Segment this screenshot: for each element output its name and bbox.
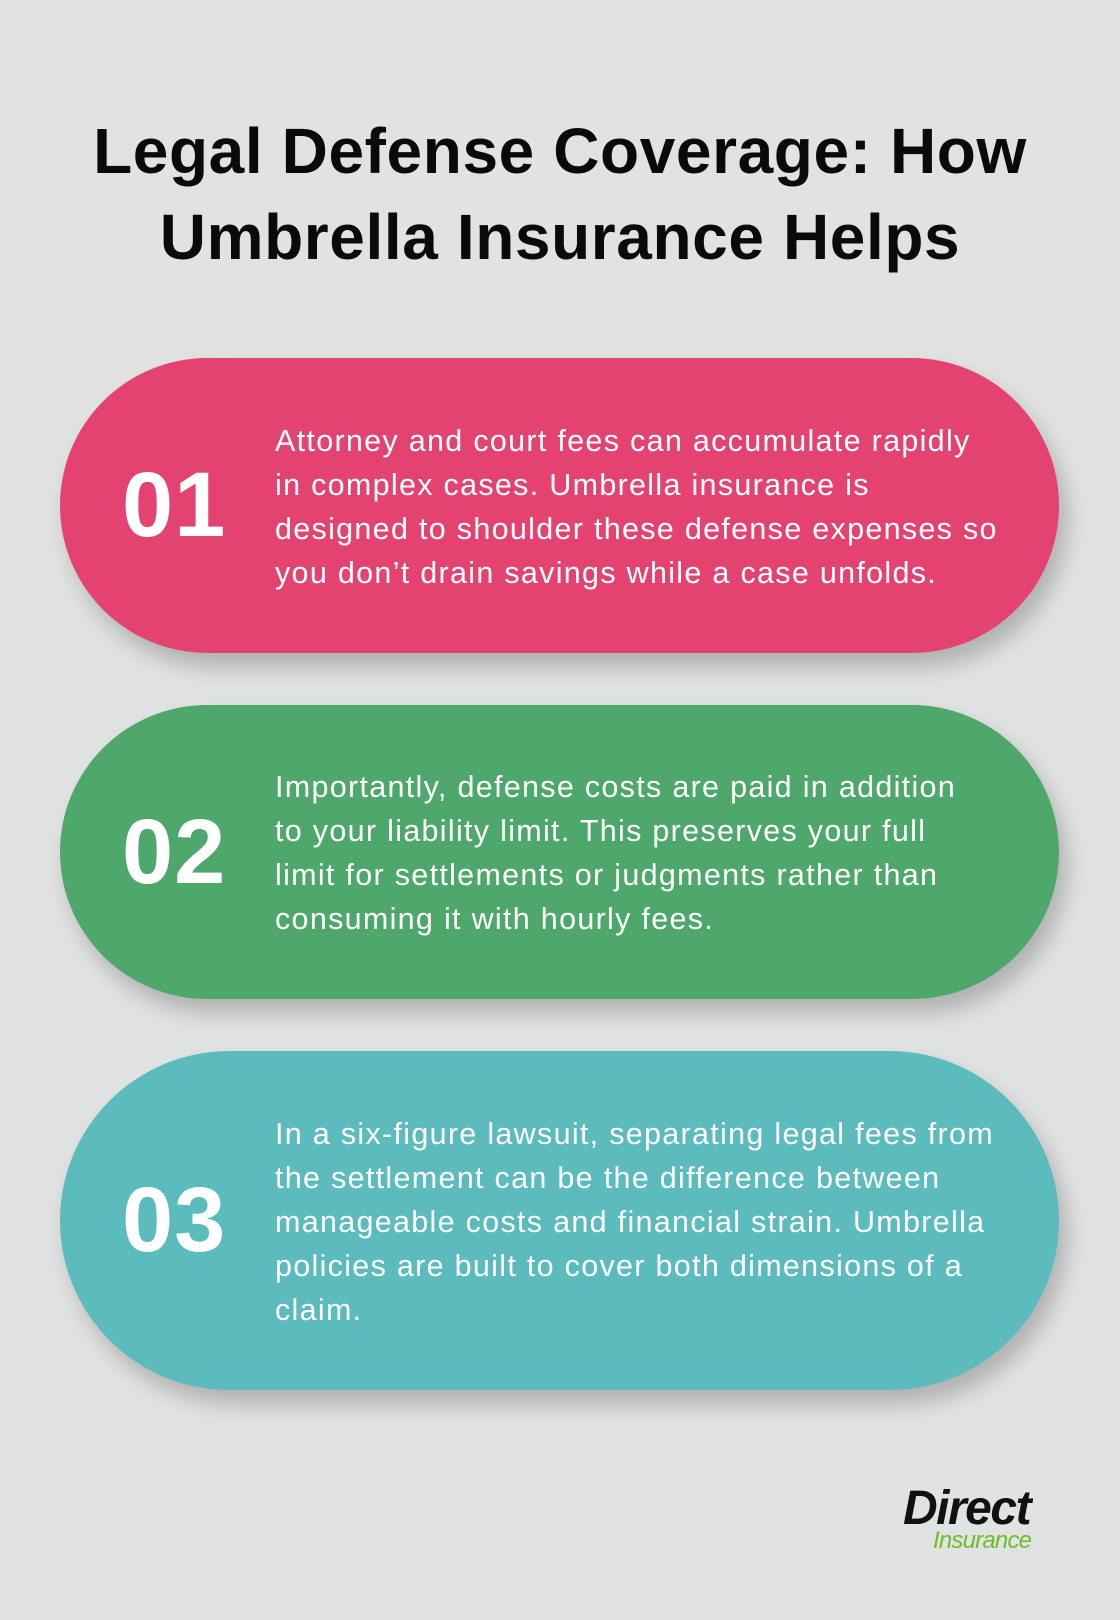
- panel: item 01: [60, 358, 1059, 653]
- title: [93, 115, 1027, 273]
- panel: item 03: [60, 1051, 1059, 1390]
- text 03: In a six-figure lawsuit, separating legal fees from: [275, 1116, 994, 1150]
- text 03: claim.: [275, 1292, 362, 1326]
- number 02: 02: [122, 800, 226, 902]
- text 03: policies are built to cover both dimensions of a: [275, 1248, 963, 1282]
- text 02: limit for settlements or judgments rather than: [275, 858, 938, 892]
- text 01: [275, 424, 998, 590]
- text 01: in complex cases. Umbrella insurance is: [275, 468, 870, 502]
- text 02: [275, 770, 956, 936]
- text 01: Attorney and court fees can accumulate rapidly: [275, 424, 971, 458]
- text 03: [275, 1116, 994, 1326]
- text 03: manageable costs and financial strain. Umbrella: [275, 1204, 985, 1238]
- logo: Direct: [903, 1482, 1030, 1535]
- logo: Insurance: [933, 1527, 1031, 1554]
- title: Legal Defense Coverage: How: [93, 115, 1027, 187]
- text 02: consuming it with hourly fees.: [275, 902, 714, 936]
- panel: item 02: [60, 705, 1059, 999]
- number 01: 01: [122, 454, 226, 556]
- text 01: you don’t drain savings while a case unfolds.: [275, 556, 937, 590]
- title: Umbrella Insurance Helps: [160, 201, 960, 273]
- text 02: Importantly, defense costs are paid in addition: [275, 770, 956, 804]
- text 03: the settlement can be the difference between: [275, 1160, 940, 1194]
- number 03: 03: [122, 1169, 226, 1271]
- text 02: to your liability limit. This preserves your full: [275, 814, 926, 848]
- text 01: designed to shoulder these defense expenses so: [275, 512, 998, 546]
